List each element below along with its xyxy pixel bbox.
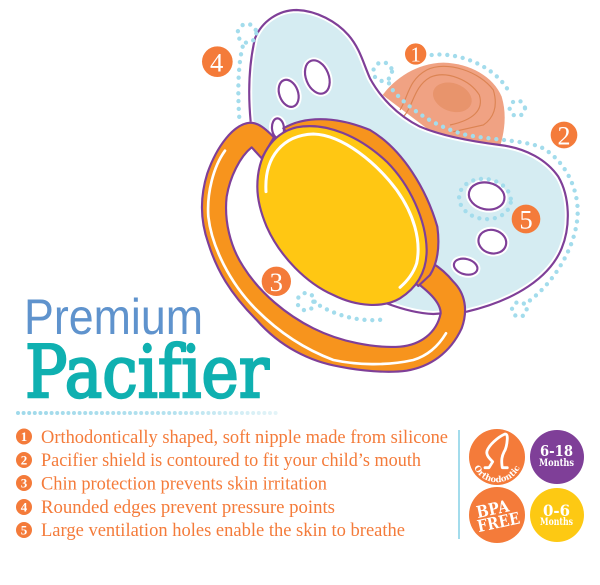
dotted leader lines [238,24,578,320]
feature 3: 3 [21,476,28,490]
badge: 0-6 months: Months [540,517,573,528]
feature 2: 2 [21,452,27,468]
callout 3 [262,267,291,297]
nipple [383,63,505,147]
chin ring [202,123,465,372]
title: Premium: Premium [24,289,203,345]
callout 4: 4 [210,47,223,77]
feature 4: Rounded edges prevent pressure points [41,498,335,518]
pacifier illustration [202,10,578,372]
badge: 0-6 months [530,488,584,542]
disc highlight [266,134,418,287]
feature 2: Pacifier shield is contoured to fit your child’s mouth [41,451,421,471]
callout 2: 2 [557,121,570,150]
feature 4: 4 [21,500,28,514]
feature 3: Chin protection prevents skin irritation [41,474,327,494]
title: Pacifier: Pacifier [25,330,270,414]
callout 5: 5 [519,205,533,235]
feature 5: 5 [21,522,28,538]
feature 5: Large ventilation holes enable the skin to breathe [41,521,405,541]
badge: 6-18 months [530,430,584,484]
badge: 6-18 months: Months [539,458,574,469]
callout 4 [202,46,233,77]
feature 1: Orthodontically shaped, soft nipple made from silicone [41,428,448,448]
badge: BPA free: FREE [476,509,522,536]
shield back rim [283,119,438,286]
shield [249,10,568,314]
badge: BPA free: BPA [475,497,511,522]
feature list [16,428,448,541]
badge: orthodontic [469,429,525,485]
callout 1: 1 [411,44,421,66]
badge: orthodontic: Orthodontic [475,466,520,482]
ventilation holes [271,57,509,277]
badge: 6-18 months: 6-18 [540,442,573,460]
ring highlight [208,151,446,364]
dotted divider [18,411,280,415]
badge: 0-6 months: 0-6 [543,501,570,520]
callout 2 [551,121,577,150]
yellow disc [257,126,427,305]
vertical divider [458,430,460,539]
feature 1: 1 [21,429,27,444]
badge: BPA free [469,487,525,543]
callout 1 [405,43,426,66]
callout 5 [512,205,540,235]
callout 3: 3 [270,267,283,297]
